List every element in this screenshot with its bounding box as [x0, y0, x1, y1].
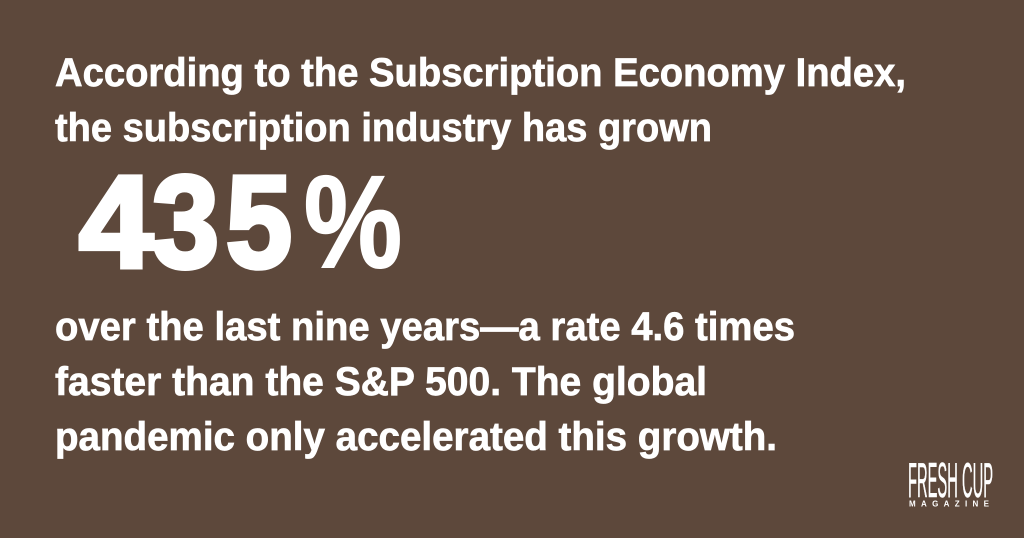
heading text: According to the Subscription Economy Index,	[55, 51, 906, 95]
big number: 435%: %	[304, 148, 402, 295]
body text: faster than the S&P 500. The global	[55, 360, 707, 404]
big number: 435%	[79, 148, 402, 295]
heading text: the subscription industry has grown	[55, 106, 712, 150]
big number: 435%: 4	[79, 148, 153, 295]
big number: 435%: 5	[226, 148, 292, 295]
body text	[55, 305, 795, 459]
body text: over the last nine years—a rate 4.6 times	[55, 305, 795, 349]
heading text	[55, 51, 906, 150]
body text: pandemic only accelerated this growth.	[55, 415, 777, 459]
big number: 435%: 3	[152, 148, 219, 295]
logo: Fresh Cup Magazine: MAGAZINE	[909, 500, 990, 508]
